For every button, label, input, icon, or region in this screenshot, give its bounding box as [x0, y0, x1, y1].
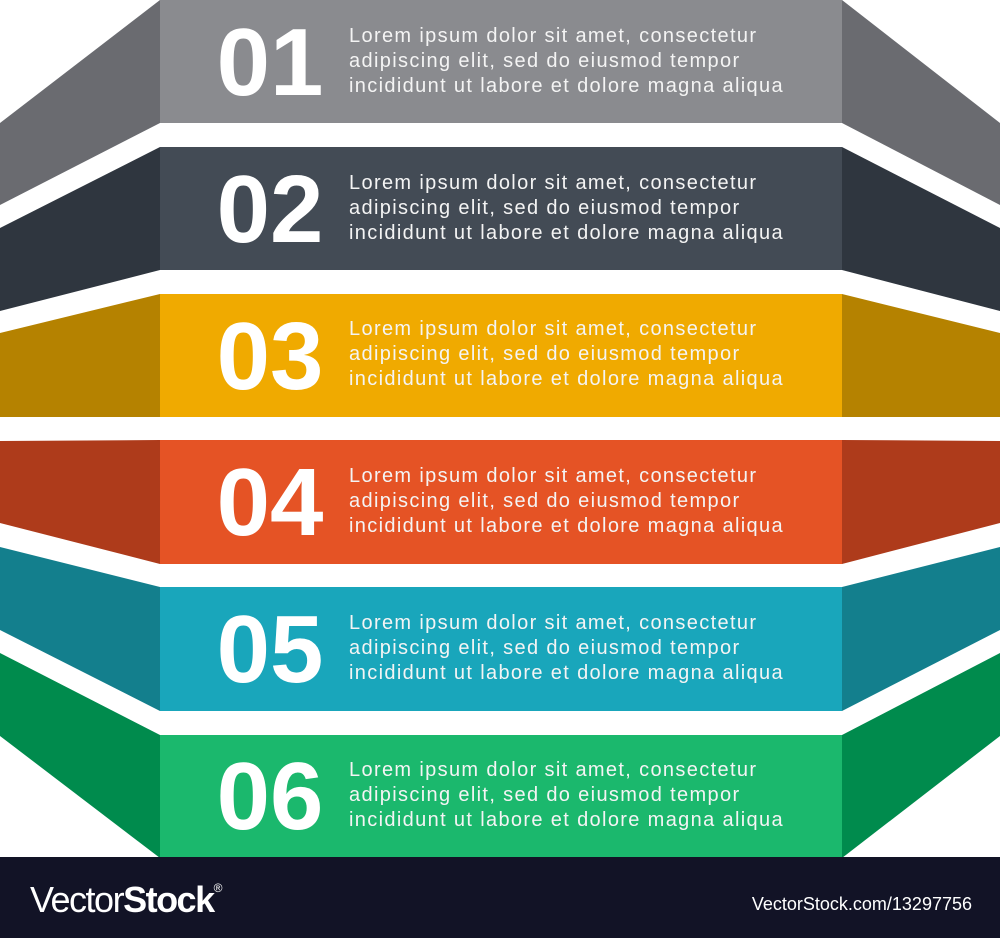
step 6: 06 — [217, 743, 323, 850]
footer — [0, 857, 1000, 938]
step 4: adipiscing elit, sed do eiusmod tempor — [349, 490, 740, 512]
step 3: incididunt ut labore et dolore magna aliqua — [349, 368, 784, 390]
step 5: incididunt ut labore et dolore magna aliqua — [349, 662, 784, 684]
step 6 — [0, 653, 1000, 858]
step 2: Lorem ipsum dolor sit amet, consectetur — [349, 172, 757, 194]
step 4 — [0, 440, 1000, 564]
footer: ® — [214, 881, 223, 895]
step 2 — [0, 147, 1000, 311]
step 3: adipiscing elit, sed do eiusmod tempor — [349, 343, 740, 365]
step 5: 05 — [217, 596, 323, 703]
step 6: Lorem ipsum dolor sit amet, consectetur — [349, 759, 757, 781]
step 1: adipiscing elit, sed do eiusmod tempor — [349, 50, 740, 72]
footer: VectorStock.com/13297756 — [752, 894, 972, 914]
step 2: incididunt ut labore et dolore magna aliqua — [349, 222, 784, 244]
step 3: 03 — [217, 303, 323, 410]
step 1: Lorem ipsum dolor sit amet, consectetur — [349, 25, 757, 47]
step 5 — [0, 547, 1000, 711]
step 2: adipiscing elit, sed do eiusmod tempor — [349, 197, 740, 219]
footer: VectorStock — [30, 879, 214, 920]
step 5: adipiscing elit, sed do eiusmod tempor — [349, 637, 740, 659]
step 1 — [0, 0, 1000, 205]
step 6: incididunt ut labore et dolore magna aliqua — [349, 809, 784, 831]
step 1: incididunt ut labore et dolore magna aliqua — [349, 75, 784, 97]
step 5: Lorem ipsum dolor sit amet, consectetur — [349, 612, 757, 634]
step 6: adipiscing elit, sed do eiusmod tempor — [349, 784, 740, 806]
step 3 — [0, 294, 1000, 417]
step 4: incididunt ut labore et dolore magna aliqua — [349, 515, 784, 537]
step 2: 02 — [217, 156, 323, 263]
step 4: 04 — [217, 449, 323, 556]
step 1: 01 — [217, 9, 323, 116]
step 3: Lorem ipsum dolor sit amet, consectetur — [349, 318, 757, 340]
step 4: Lorem ipsum dolor sit amet, consectetur — [349, 465, 757, 487]
